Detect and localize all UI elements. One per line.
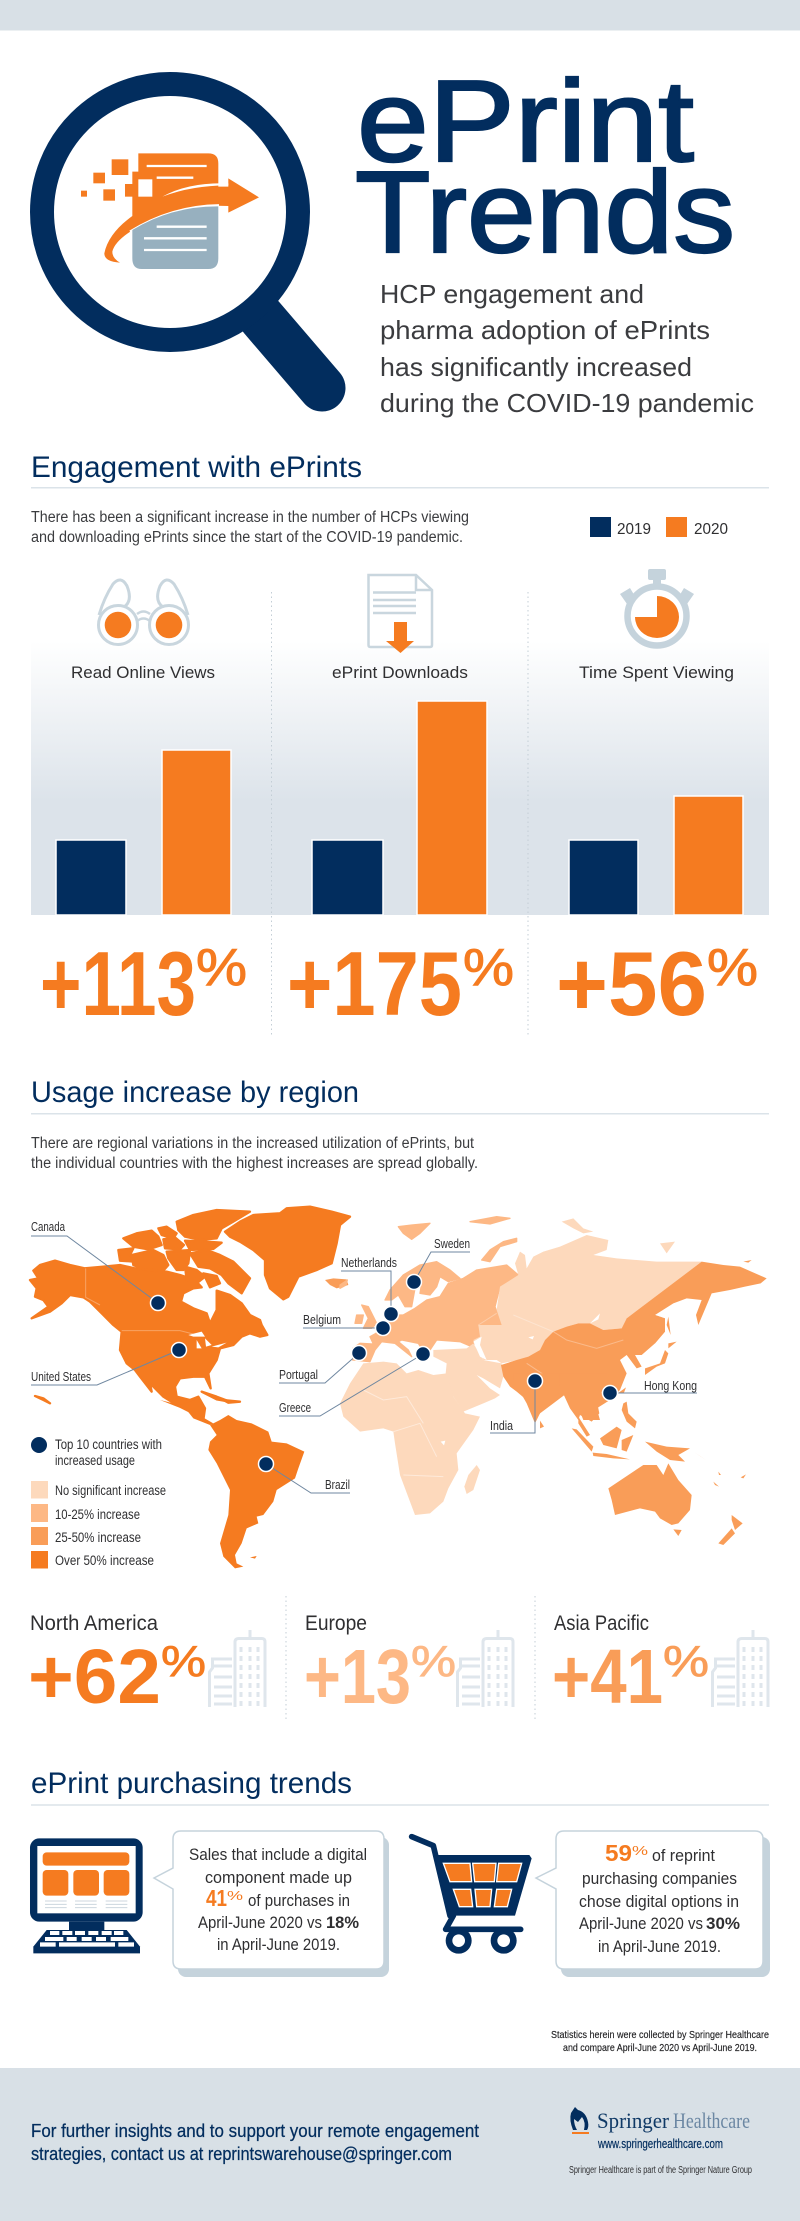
map legend <box>31 1437 166 1568</box>
icon: shopping cart <box>412 1837 532 1950</box>
map country labels <box>31 1219 697 1492</box>
icon: computer <box>30 1838 143 1953</box>
callout: digital options: in April-June 2019. <box>598 1937 721 1956</box>
intro text: engagement <box>31 509 469 546</box>
logo: Springer Healthcare: Springer <box>597 2108 670 2133</box>
stat: North America: % <box>161 1637 206 1686</box>
label: eprint downloads: ePrint Downloads <box>332 663 468 682</box>
heading: usage by region: Usage increase by region <box>31 1076 359 1109</box>
map legend: 25-50% increase <box>55 1530 141 1545</box>
callout: digital options: purchasing companies <box>582 1869 737 1888</box>
callout: digital component: of purchases in <box>248 1891 350 1910</box>
stat: Asia Pacific <box>552 1612 709 1720</box>
map legend: Top 10 countries with <box>55 1437 162 1452</box>
icon: glasses <box>98 580 188 644</box>
subtitle: has significantly increased <box>380 352 692 382</box>
footer band <box>0 2068 800 2221</box>
intro text: region: the individual countries with the highest increases are spread globally. <box>31 1155 478 1172</box>
callout: digital component: April-June 2020 vs <box>198 1913 322 1932</box>
callout: digital component: 41 <box>206 1885 227 1911</box>
footnote: and compare April-June 2020 vs April-June 2019. <box>563 2042 757 2054</box>
subtitle: during the COVID-19 pandemic <box>380 388 754 418</box>
subtitle: HCP engagement and <box>380 279 644 309</box>
stat: Europe: +13 <box>304 1634 411 1720</box>
stat: +56%: % <box>707 939 758 997</box>
stat: Europe: Europe <box>305 1612 367 1635</box>
icon: buildings Asia Pacific <box>712 1630 768 1707</box>
map legend: Over 50% increase <box>55 1553 154 1568</box>
callout: digital options: April-June 2020 vs <box>579 1914 703 1933</box>
map country labels: Canada <box>31 1219 66 1234</box>
map country labels: United States <box>31 1369 91 1384</box>
subtitle <box>380 279 754 418</box>
map country labels: Hong Kong <box>644 1378 697 1393</box>
stat: +175%: +175 <box>287 934 462 1035</box>
footnote: Statistics herein were collected by Springer Healthcare <box>551 2029 769 2041</box>
title: Trends <box>355 147 735 277</box>
callout: digital options: chose digital options in <box>579 1892 739 1911</box>
callout: digital options: % <box>632 1843 649 1858</box>
map country labels: Greece <box>279 1400 311 1415</box>
legend: years: 2019 <box>617 521 651 538</box>
map country labels: Belgium <box>303 1312 341 1327</box>
icon: document download <box>368 575 432 653</box>
world map <box>30 1207 767 1568</box>
stat: North America <box>28 1612 206 1720</box>
callout: digital options: 59 <box>605 1840 632 1866</box>
stat: North America: +62 <box>28 1634 161 1720</box>
logo: Springer Healthcare: www.springerhealthcare.com <box>597 2137 723 2151</box>
callout: digital component: 18% <box>326 1913 359 1932</box>
map country labels: Sweden <box>434 1236 470 1251</box>
title: ePrint <box>357 56 694 186</box>
stat: North America: North America <box>30 1612 158 1635</box>
map legend: 10-25% increase <box>55 1507 140 1522</box>
map country labels: India <box>490 1418 514 1433</box>
map country labels: Portugal <box>279 1367 318 1382</box>
footnote <box>551 2029 769 2054</box>
heading: purchasing trends: ePrint purchasing trends <box>31 1767 352 1800</box>
callout: digital component: Sales that include a digital <box>189 1845 367 1864</box>
label: time spent viewing: Time Spent Viewing <box>579 663 734 682</box>
stat: Europe <box>304 1612 456 1720</box>
callout: digital options: of reprint <box>652 1846 715 1865</box>
stat: +113%: % <box>196 939 247 997</box>
stat: Asia Pacific: +41 <box>552 1634 663 1720</box>
logo: Springer Healthcare <box>569 2107 752 2176</box>
map legend: No significant increase <box>55 1483 166 1498</box>
stat: Asia Pacific: % <box>663 1637 709 1686</box>
footer call to action: strategies, contact us at reprintswarehouse@springer.com <box>31 2144 452 2164</box>
stat: +175%: % <box>463 939 514 997</box>
callout: digital options: 30% <box>706 1914 740 1933</box>
icon: buildings North America <box>210 1630 265 1707</box>
stat: Europe: % <box>411 1637 456 1686</box>
label: read online views: Read Online Views <box>71 663 215 682</box>
footer call to action: For further insights and to support your remote engagement <box>31 2121 479 2141</box>
panel: bar chart background <box>31 641 769 915</box>
intro text: region <box>31 1135 478 1172</box>
heading: engagement: Engagement with ePrints <box>31 451 362 484</box>
callout: digital component <box>154 1831 389 1977</box>
map markers <box>150 1274 618 1472</box>
stat: +113%: +113 <box>40 934 196 1035</box>
intro text: engagement: There has been a significant increase in the number of HCPs viewing <box>31 509 469 526</box>
map country labels: Netherlands <box>341 1255 397 1270</box>
map country labels: Brazil <box>325 1477 350 1492</box>
icon: stopwatch <box>620 569 694 646</box>
legend: years: 2020 <box>694 521 728 538</box>
callout: digital component: component made up <box>205 1868 352 1887</box>
map leaders <box>31 1236 697 1493</box>
top band <box>0 0 800 30</box>
icon: magnifying glass with document <box>42 84 322 388</box>
title <box>355 56 735 277</box>
logo: Springer Healthcare: Healthcare <box>673 2108 750 2133</box>
legend: years <box>590 517 728 538</box>
intro text: region: There are regional variations in the increased utilization of ePrints, but <box>31 1135 475 1152</box>
callout: digital component: in April-June 2019. <box>217 1935 340 1954</box>
intro text: engagement: and downloading ePrints since the start of the COVID-19 pandemic. <box>31 529 463 546</box>
callout: digital component: % <box>227 1888 244 1903</box>
bar chart <box>56 701 743 915</box>
subtitle: pharma adoption of ePrints <box>380 315 710 345</box>
footer call to action <box>31 2121 479 2164</box>
callout: digital options <box>536 1831 770 1977</box>
map legend: increased usage <box>55 1453 135 1468</box>
stat: Asia Pacific: Asia Pacific <box>554 1612 649 1635</box>
icon: buildings Europe <box>458 1630 513 1707</box>
stat: +56%: +56 <box>556 934 707 1035</box>
